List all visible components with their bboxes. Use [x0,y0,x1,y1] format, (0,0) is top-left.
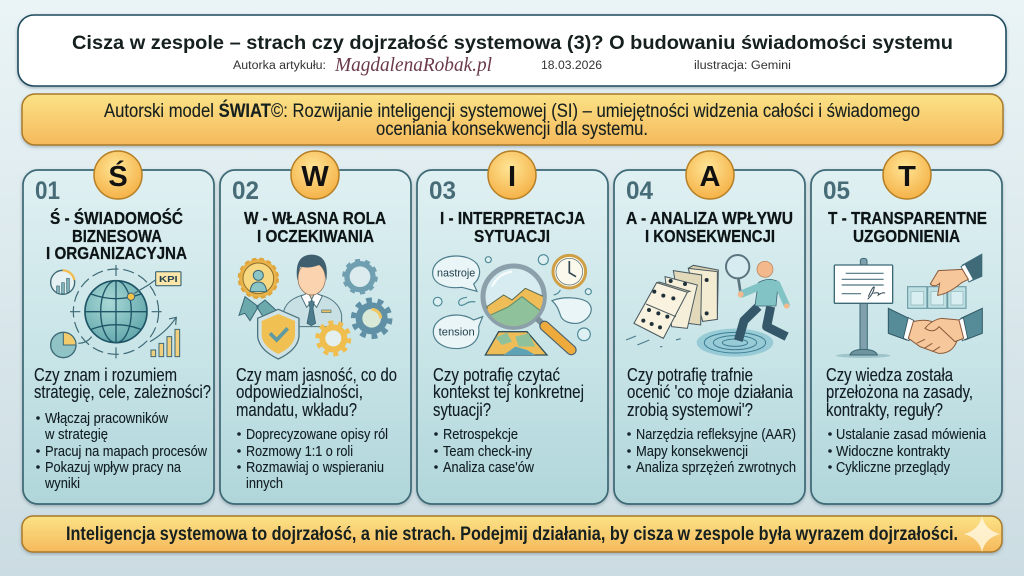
author signature: MagdalenaRobak.pl [334,54,492,76]
heading 05: T - TRANSPARENTNE [828,208,987,228]
number 04: 04 [626,177,653,205]
bullets 02: innych [246,475,283,492]
badge: I: I [508,161,516,193]
badge: W: W [301,161,329,193]
banner text line 2: oceniania konsekwencji dla systemu. [376,119,648,140]
question 02: mandatu, wkładu? [236,400,357,420]
heading 01: BIZNESOWA [72,226,162,246]
question 03 [433,365,584,420]
bullets 03: Analiza case'ów [443,459,534,476]
bullets 04: Mapy konsekwencji [636,443,748,460]
bullets 04: Narzędzia refleksyjne (AAR) [636,426,796,443]
heading 02: W - WŁASNA ROLA [244,208,386,228]
model banner [22,94,1003,145]
illustration credit: ilustracja: Gemini [694,60,791,72]
author label: Autorka artykułu: [233,60,326,72]
heading 04: I KONSEKWENCJI [645,226,775,246]
question 01: Czy znam i rozumiem [34,365,177,385]
bullets 04 [627,426,796,476]
question 04: zrobią systemowi'? [627,400,753,420]
question 03: sytuacji? [433,400,491,420]
bullets 05: Cykliczne przeglądy [836,459,950,476]
heading 05 [828,208,987,246]
question 02: odpowiedzialności, [236,382,363,402]
bullets 02: Rozmawiaj o wspieraniu [246,459,384,476]
icon: magnifier with speech bubbles [433,255,591,355]
question 04: ocenić 'co moje działania [627,382,794,402]
heading 01 [46,207,187,263]
bullets 01: Włączaj pracowników [45,410,168,427]
closing banner [22,516,1002,552]
heading 03: SYTUACJI [474,226,550,246]
badge: I [488,151,536,199]
bullets 05: Widoczne kontrakty [836,443,950,460]
bullets 02: Doprecyzowane opisy ról [246,426,388,443]
bullets 02 [237,426,388,492]
question 05 [826,365,973,420]
question 03: Czy potrafię czytać [433,365,560,385]
number 02: 02 [232,177,259,205]
badge: Ś [94,151,142,199]
icon: globe with KPI: KPI [159,274,178,284]
icon: magnifier with speech bubbles: nastroje [437,267,475,279]
badge: T: T [898,161,916,193]
bullets 04: Analiza sprzężeń zwrotnych [636,459,796,476]
question 02 [236,365,397,420]
badge: A: A [700,161,721,193]
bullets 03 [434,426,534,476]
bullets 03: Retrospekcje [443,426,518,443]
question 01 [34,365,211,402]
heading 02 [244,208,386,246]
heading 03 [440,208,585,246]
icon: falling dominoes and person with magnifier [626,255,789,357]
bullets 03: Team check-iny [443,443,532,460]
icon: sparkle [964,516,1000,552]
title panel [18,15,1006,86]
bullets 02: Rozmowy 1:1 o roli [246,443,353,460]
badge: T [883,151,931,199]
number 03: 03 [429,177,456,205]
icon: role with badge, shield and gears [239,255,390,359]
icon: magnifier with speech bubbles: tension [439,326,475,338]
question 04: Czy potrafię trafnie [627,365,753,385]
heading 04 [626,208,793,246]
question 02: Czy mam jasność, co do [236,365,397,385]
question 01: strategię, cele, zależności? [34,382,211,402]
number 01: 01 [35,177,60,205]
heading 05: UZGODNIENIA [853,226,960,246]
date: 18.03.2026 [541,60,602,72]
badge: Ś: Ś [108,159,128,193]
question 05: przełożona na zasady, [826,382,973,402]
badge: A [686,151,734,199]
bullets 05 [828,426,987,476]
bullets 01: Pracuj na mapach procesów [45,443,207,460]
panel: 05 T [811,151,1002,504]
panel: 02 W [220,151,411,504]
icon: globe with KPI [51,265,181,358]
heading 01: I ORGANIZACYJNA [46,243,187,263]
question 03: kontekst tej konkretnej [433,382,584,402]
heading 03: I - INTERPRETACJA [440,208,585,228]
icon: signed contract, glass blocks and handshake [834,253,982,358]
bullets 05: Ustalanie zasad mówienia [836,426,987,443]
number 05: 05 [823,177,850,205]
bullets 01: Pokazuj wpływ pracy na [45,459,182,476]
panel: 01 Ś [23,151,214,504]
panel: 04 A [614,151,805,504]
heading 04: A - ANALIZA WPŁYWU [626,208,793,228]
bullets 01: w strategię [44,426,108,443]
heading 02: I OCZEKIWANIA [257,226,374,246]
heading 01: Ś - ŚWIADOMOŚĆ [50,207,183,228]
banner text line 1: Autorski model ŚWIAT©: Rozwijanie inteligencji systemowej (SI) – umiejętności widzenia całości i świadomego [104,100,920,122]
badge: W [291,151,339,199]
panel: 03 I [417,151,608,504]
bullets 01: wyniki [44,475,80,492]
title: Cisza w zespole – strach czy dojrzałość systemowa (3)? O budowaniu świadomości systemu [72,32,953,54]
question 05: Czy wiedza została [826,365,954,385]
question 05: kontrakty, reguły? [826,400,943,420]
question 04 [627,365,794,420]
bullets 01 [36,410,207,492]
